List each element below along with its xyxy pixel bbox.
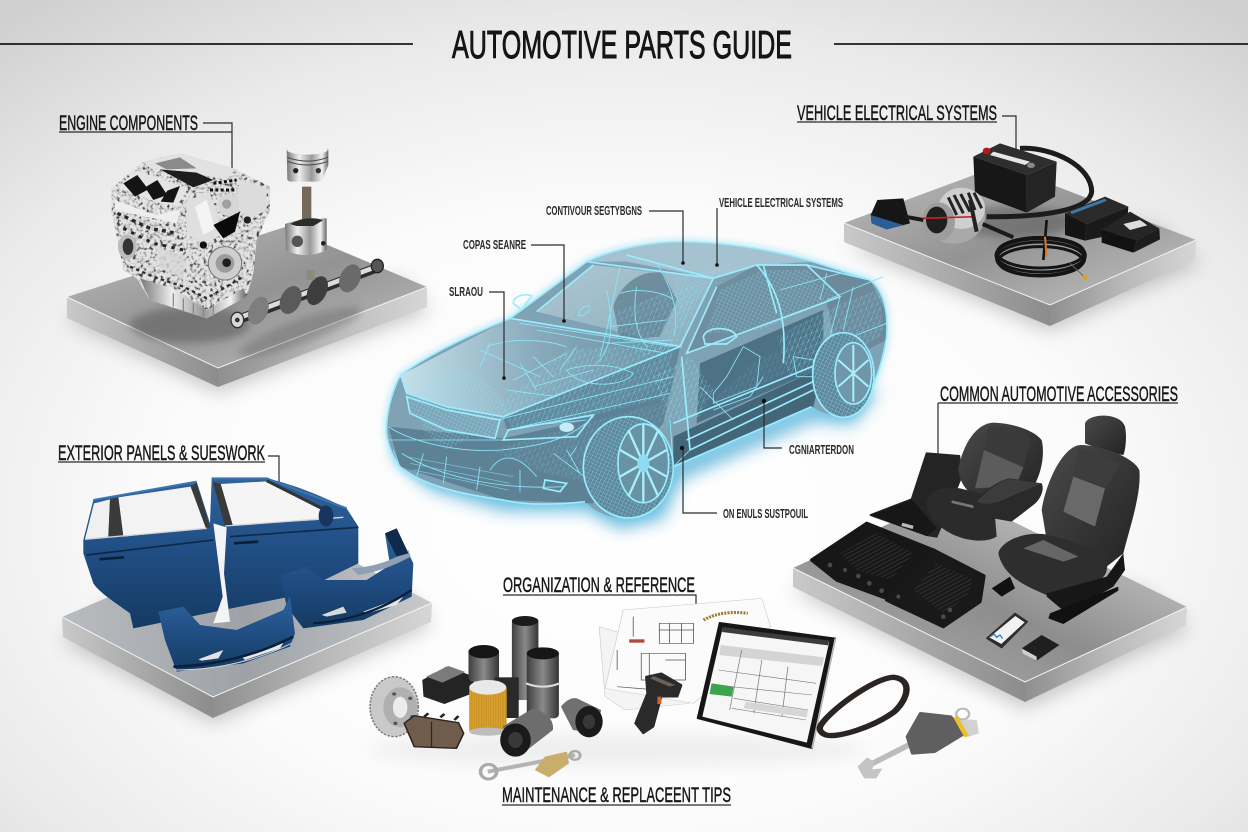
icon: key fob: [1022, 635, 1059, 661]
icon: smartphone: [987, 613, 1027, 648]
icon: filter cylinders: [468, 616, 560, 718]
label: slraou: SLRAOU: [449, 284, 483, 299]
icon: wiring connector: [871, 198, 1013, 237]
panel: maintenance and reference: [368, 574, 979, 807]
icon: right car seat: [992, 416, 1140, 624]
icon: alternator: [921, 186, 985, 244]
car body shell: [386, 242, 887, 518]
label: contivour segtybgns: CONTIVOUR SEGTYBGNS: [546, 203, 642, 218]
icon: camshaft: [231, 259, 383, 328]
panel: vehicle electrical systems: [797, 102, 1200, 330]
icon: brake pads: [404, 713, 464, 748]
wireframe structural lines: [386, 242, 887, 504]
wireframe front wheel: [583, 417, 673, 518]
icon: tablet: [698, 623, 835, 748]
label: on enuls sustpouil: [680, 446, 808, 521]
icon: wrench with cloth: [857, 709, 979, 778]
icon: yellow oil filter: [469, 680, 507, 736]
wireframe mesh: engine bay and cabin: [417, 263, 883, 483]
icon: car doors: [83, 478, 358, 628]
wireframe headlight and fog lamp: [407, 415, 593, 492]
label: cgniarterdon: CGNIARTERDON: [789, 442, 854, 457]
heading: maintenance and replacement tips: MAINTENANCE & REPLACEENT TIPS: [502, 784, 731, 807]
title: AUTOMOTIVE PARTS GUIDE: [452, 24, 792, 67]
heading: vehicle electrical systems: [797, 102, 1016, 150]
car glow and floor shadow: [386, 242, 887, 530]
heading: engine components: ENGINE COMPONENTS: [59, 112, 198, 135]
panel: engine components: [59, 112, 430, 392]
icon: wire coil: [996, 220, 1088, 280]
label: on enuls sustpouil: ON ENULS SUSTPOUIL: [723, 506, 808, 521]
icon: left car seat: [927, 423, 1043, 541]
wireframe side mirrors: [513, 295, 737, 344]
icon: rear floor mat: [871, 453, 960, 537]
exterior platform: [62, 523, 432, 718]
icon: brake caliper: [422, 666, 475, 704]
label: copas seanre: [463, 237, 566, 323]
heading: exterior panels and bodywork: [58, 442, 279, 525]
icon: front floor mats: [812, 523, 984, 627]
heading: organization and reference: ORGANIZATION & REFERENCE: [503, 574, 695, 597]
icon: battery cable: [987, 148, 1092, 217]
heading: common automotive accessories: [938, 383, 1178, 457]
icon: engine block: [112, 153, 270, 318]
heading: exterior panels and bodywork: EXTERIOR PANELS & SUESWORK: [58, 442, 265, 465]
icon: rear bumper: [280, 528, 413, 628]
icon: angled filters: [500, 698, 603, 757]
heading: organization and reference: [503, 574, 696, 667]
icon: front bumper: [158, 597, 295, 672]
label: copas seanre: COPAS SEANRE: [463, 237, 526, 252]
panel: exterior panels and bodywork: [58, 442, 432, 722]
heading: vehicle electrical systems: VEHICLE ELECTRICAL SYSTEMS: [797, 102, 997, 125]
wireframe grille: [407, 397, 500, 438]
icon: drive belt: [820, 677, 906, 736]
icon: schematic papers: [599, 598, 771, 710]
icon: brake rotor: [370, 677, 418, 737]
wireframe rear wheel: [813, 333, 874, 417]
engine platform: [67, 227, 427, 387]
label: cgniarterdon: [762, 399, 854, 457]
label: vehicle electrical systems: [715, 195, 843, 267]
panel: common automotive accessories: [793, 383, 1190, 708]
label: vehicle electrical systems: VEHICLE ELECTRICAL SYSTEMS: [719, 195, 843, 210]
icon: car battery: [973, 143, 1057, 213]
electrical platform: [844, 165, 1196, 326]
label: slraou: [449, 284, 506, 380]
icon: small wrench: [481, 751, 580, 779]
label: contivour segtybgns: [546, 203, 685, 265]
icon: piston and connecting rod: [285, 145, 328, 255]
icon: barcode scanner: [635, 673, 681, 733]
heading: engine components: [59, 112, 232, 168]
icon: battery packs: [1065, 197, 1160, 253]
panel: vehicle wireframe cutaway: [386, 195, 887, 530]
accessories platform: [793, 493, 1187, 702]
